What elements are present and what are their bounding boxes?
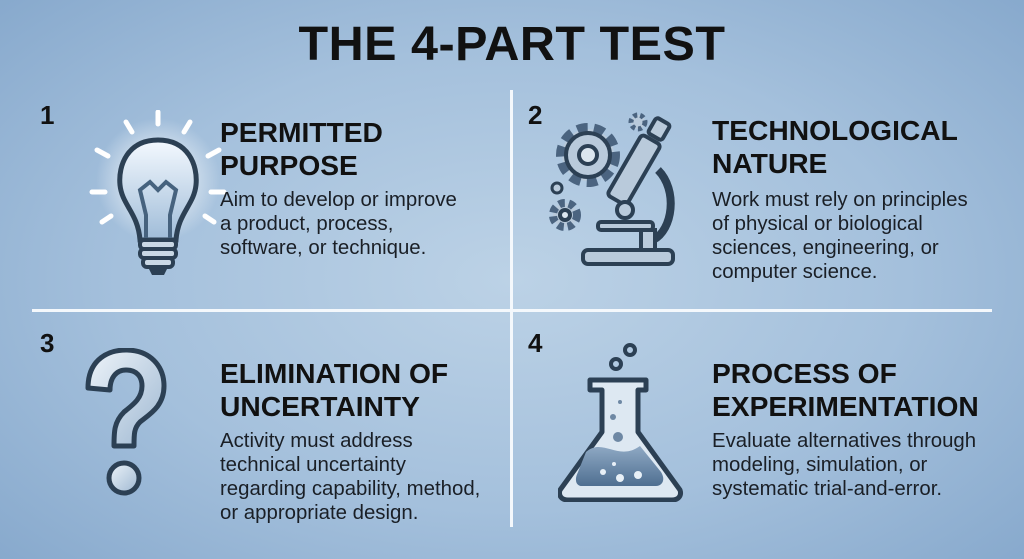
body text: or appropriate design. xyxy=(220,502,418,524)
body text: computer science. xyxy=(712,261,877,283)
heading xyxy=(220,357,448,422)
body text: sciences, engineering, or xyxy=(712,237,939,259)
body text xyxy=(220,430,480,524)
body text xyxy=(220,189,457,259)
panel: process of experimentation xyxy=(528,328,979,502)
panel: technological nature xyxy=(528,100,968,283)
heading: TECHNOLOGICAL xyxy=(712,114,958,146)
number 1: 1 xyxy=(40,100,54,130)
body text: of physical or biological xyxy=(712,213,923,235)
body text: systematic trial-and-error. xyxy=(712,478,942,500)
heading: PROCESS OF xyxy=(712,357,897,389)
icon: light bulb xyxy=(90,110,226,275)
body text: modeling, simulation, or xyxy=(712,454,927,476)
panel: elimination of uncertainty xyxy=(40,328,480,524)
body text: technical uncertainty xyxy=(220,454,406,476)
body text: a product, process, xyxy=(220,213,393,235)
body text xyxy=(712,430,976,500)
heading: EXPERIMENTATION xyxy=(712,390,979,422)
body text: Aim to develop or improve xyxy=(220,189,457,211)
body text: regarding capability, method, xyxy=(220,478,480,500)
body text: Activity must address xyxy=(220,430,413,452)
heading xyxy=(712,114,958,179)
heading: NATURE xyxy=(712,147,827,179)
title: THE 4-PART TEST xyxy=(299,17,725,71)
icon: question mark xyxy=(86,348,166,496)
body text: software, or technique. xyxy=(220,237,426,259)
body text: Evaluate alternatives through xyxy=(712,430,976,452)
number 4: 4 xyxy=(528,328,542,358)
heading xyxy=(220,116,383,181)
number 2: 2 xyxy=(528,100,542,130)
heading: ELIMINATION OF xyxy=(220,357,448,389)
heading: UNCERTAINTY xyxy=(220,390,420,422)
heading: PERMITTED xyxy=(220,116,383,148)
icon: flask xyxy=(558,343,684,502)
panel: permitted purpose xyxy=(40,100,457,275)
heading xyxy=(712,357,979,422)
body text: Work must rely on principles xyxy=(712,189,968,211)
heading: PURPOSE xyxy=(220,149,358,181)
body text xyxy=(712,189,968,283)
number 3: 3 xyxy=(40,328,54,358)
icon: gears and microscope xyxy=(549,112,675,266)
